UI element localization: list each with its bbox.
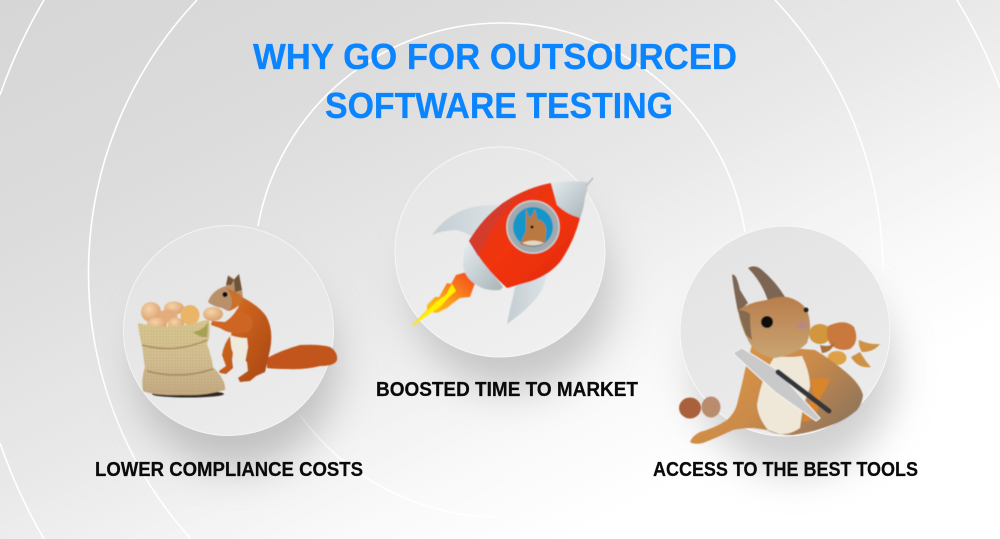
icon: rocket <box>410 178 593 327</box>
label: access to the best tools: ACCESS TO THE BEST TOOLS <box>653 458 918 481</box>
disc: right <box>680 226 895 472</box>
panel: boosted time to market <box>376 147 638 401</box>
disc: left <box>124 226 336 468</box>
title <box>253 36 737 126</box>
panel: access to the best tools <box>653 226 918 481</box>
label: lower compliance costs: LOWER COMPLIANCE COSTS <box>95 458 363 481</box>
disc: centre <box>395 147 612 390</box>
label: boosted time to market: BOOSTED TIME TO MARKET <box>376 378 638 401</box>
title: SOFTWARE TESTING <box>325 85 673 126</box>
icon: sack of walnuts <box>138 302 225 398</box>
icon: squirrel holding walnut <box>203 274 337 382</box>
icon: walnuts <box>679 322 880 418</box>
icon: squirrel with nutcracker <box>690 266 863 444</box>
title: WHY GO FOR OUTSOURCED <box>253 36 737 77</box>
panel: lower compliance costs <box>95 226 363 481</box>
